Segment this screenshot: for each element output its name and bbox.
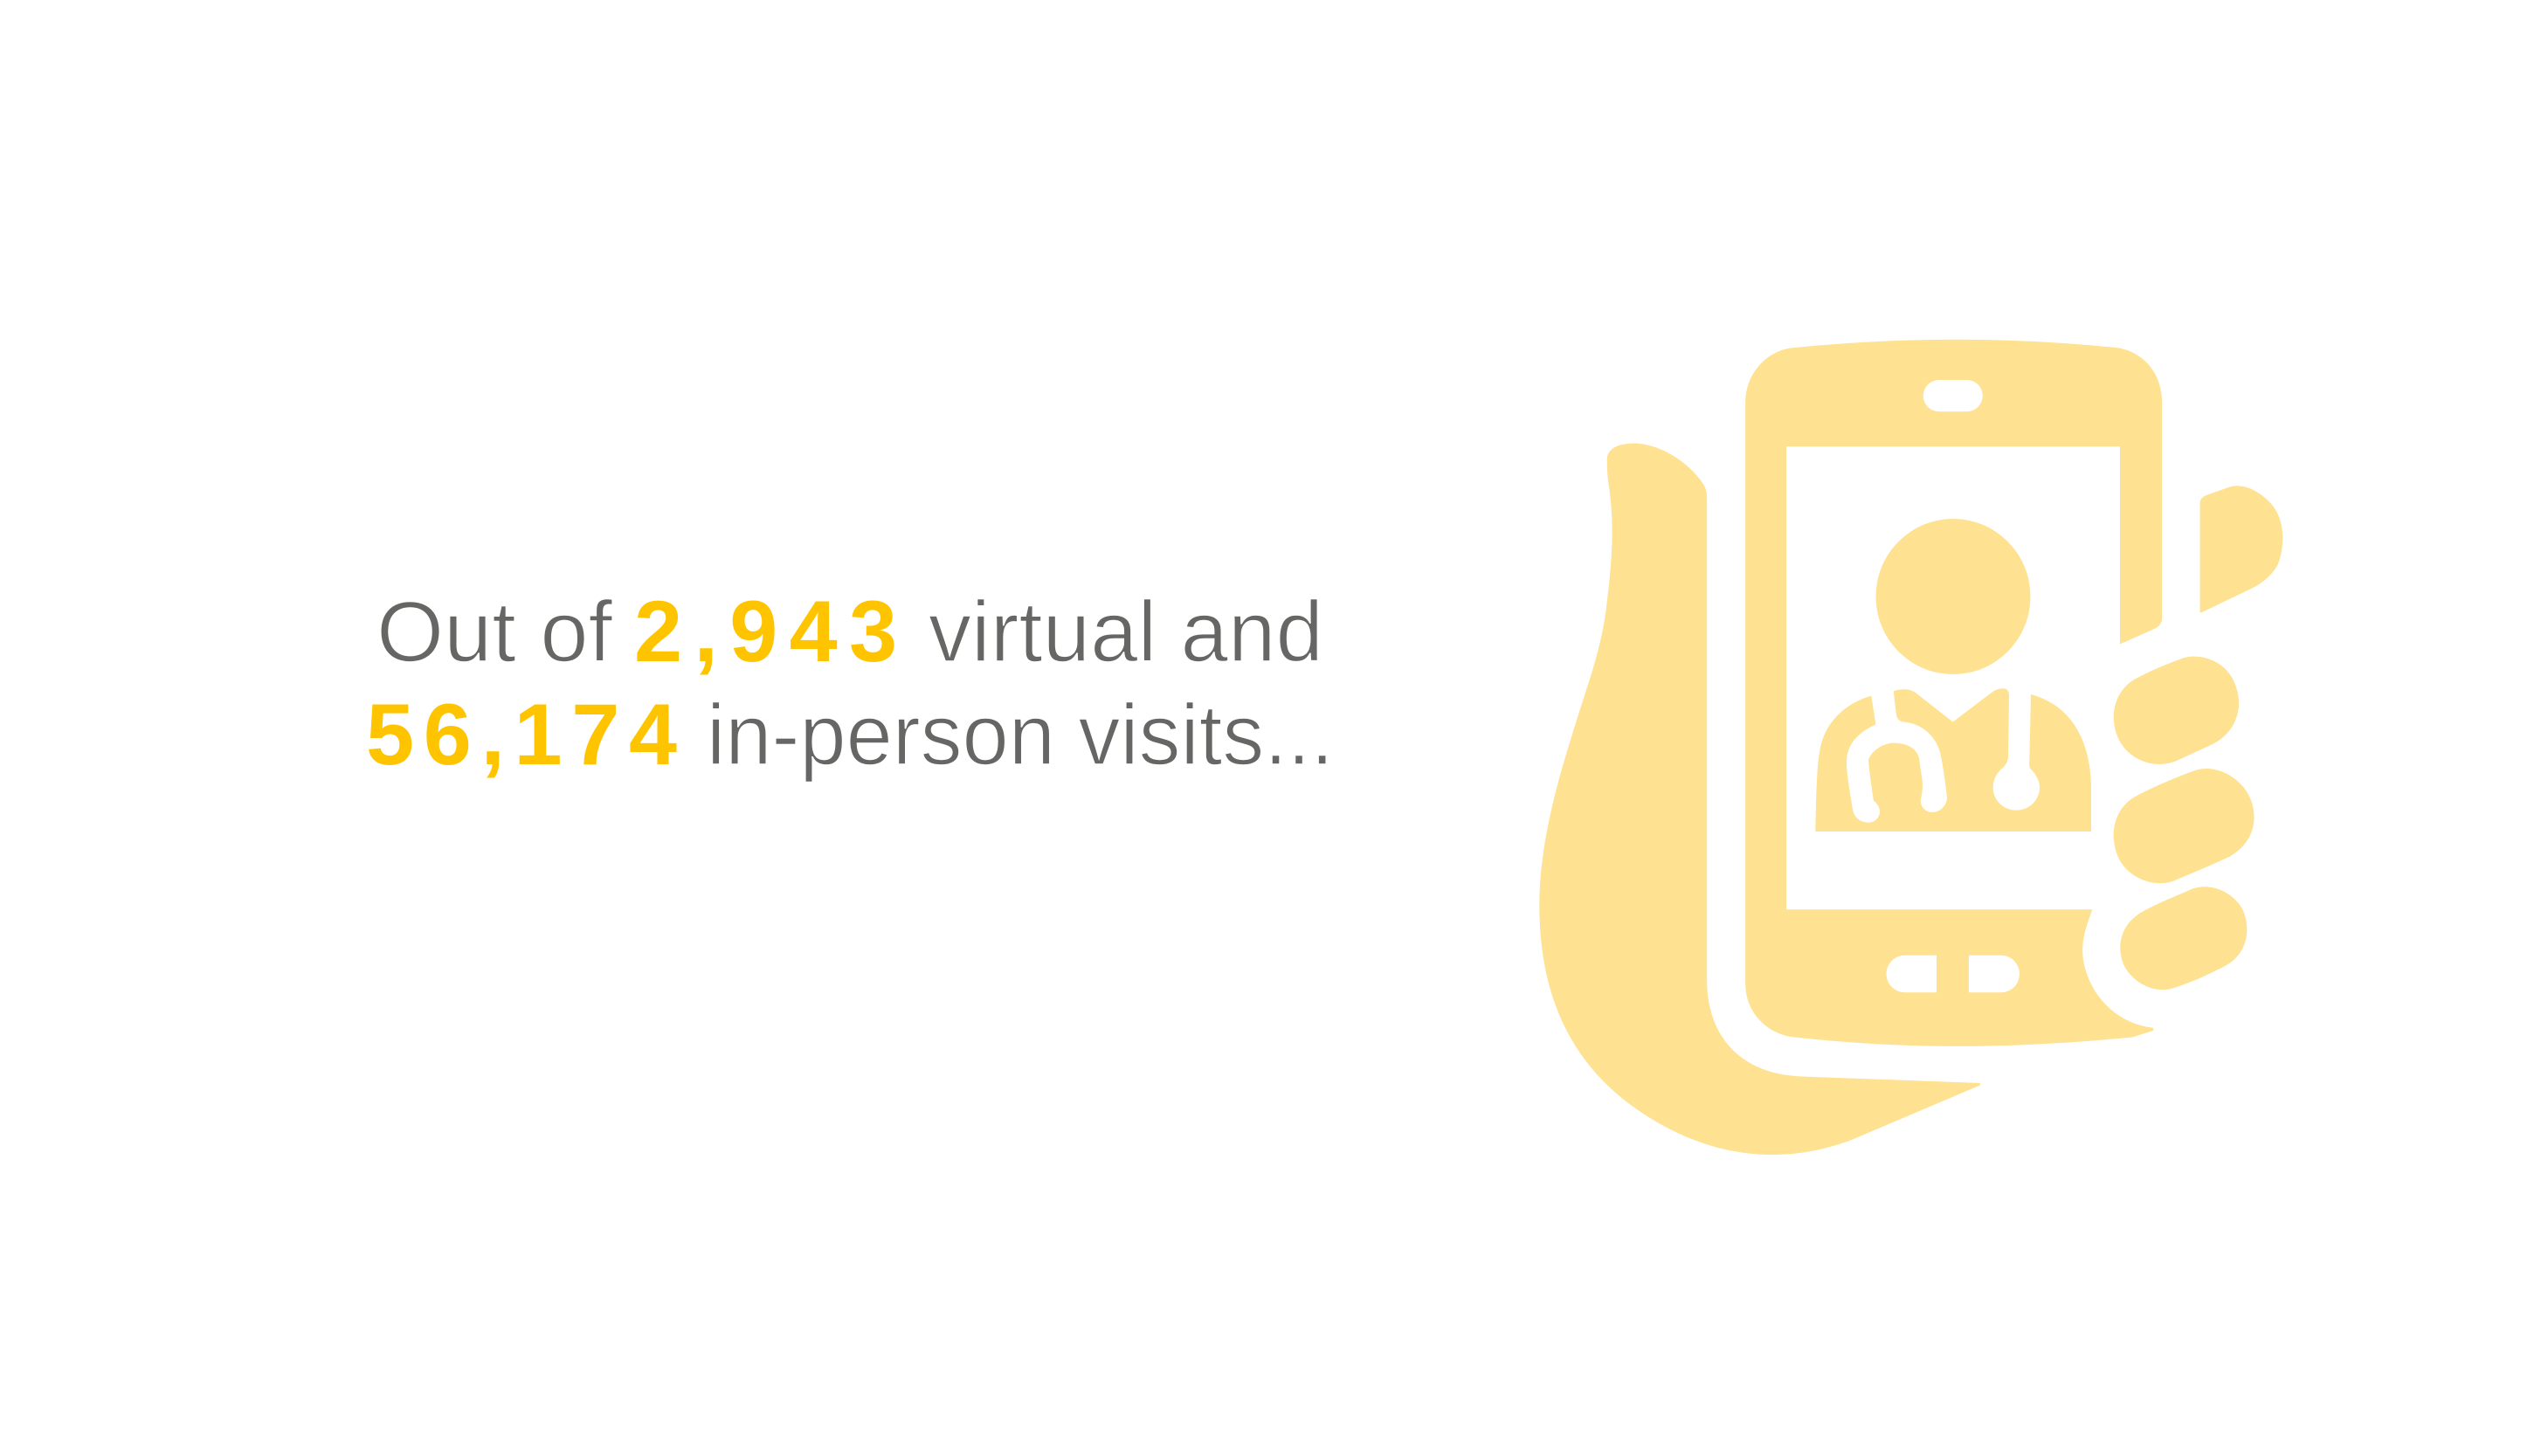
icon: hand holding phone with doctor on screen [1539, 340, 2282, 1155]
icon: palm and thumb [1539, 444, 1980, 1155]
text line 2: 56,174 [366, 686, 677, 783]
text line 2 [366, 686, 1334, 783]
text line 1: Out of [376, 583, 613, 680]
icon: ring finger [2114, 769, 2255, 883]
icon: doctor torso with stethoscope [1815, 688, 2091, 832]
icon: index finger [2200, 486, 2282, 612]
icon: phone body [1745, 340, 2162, 1046]
text line 1: virtual and [929, 583, 1323, 680]
headline text [366, 583, 1334, 783]
icon: doctor head [1876, 519, 2030, 674]
icon: middle finger [2114, 657, 2239, 764]
text line 1: 2,943 [634, 583, 897, 680]
text line 2: in-person visits... [707, 687, 1334, 783]
icon: little finger [2120, 887, 2247, 990]
text line 1 [376, 583, 1323, 680]
